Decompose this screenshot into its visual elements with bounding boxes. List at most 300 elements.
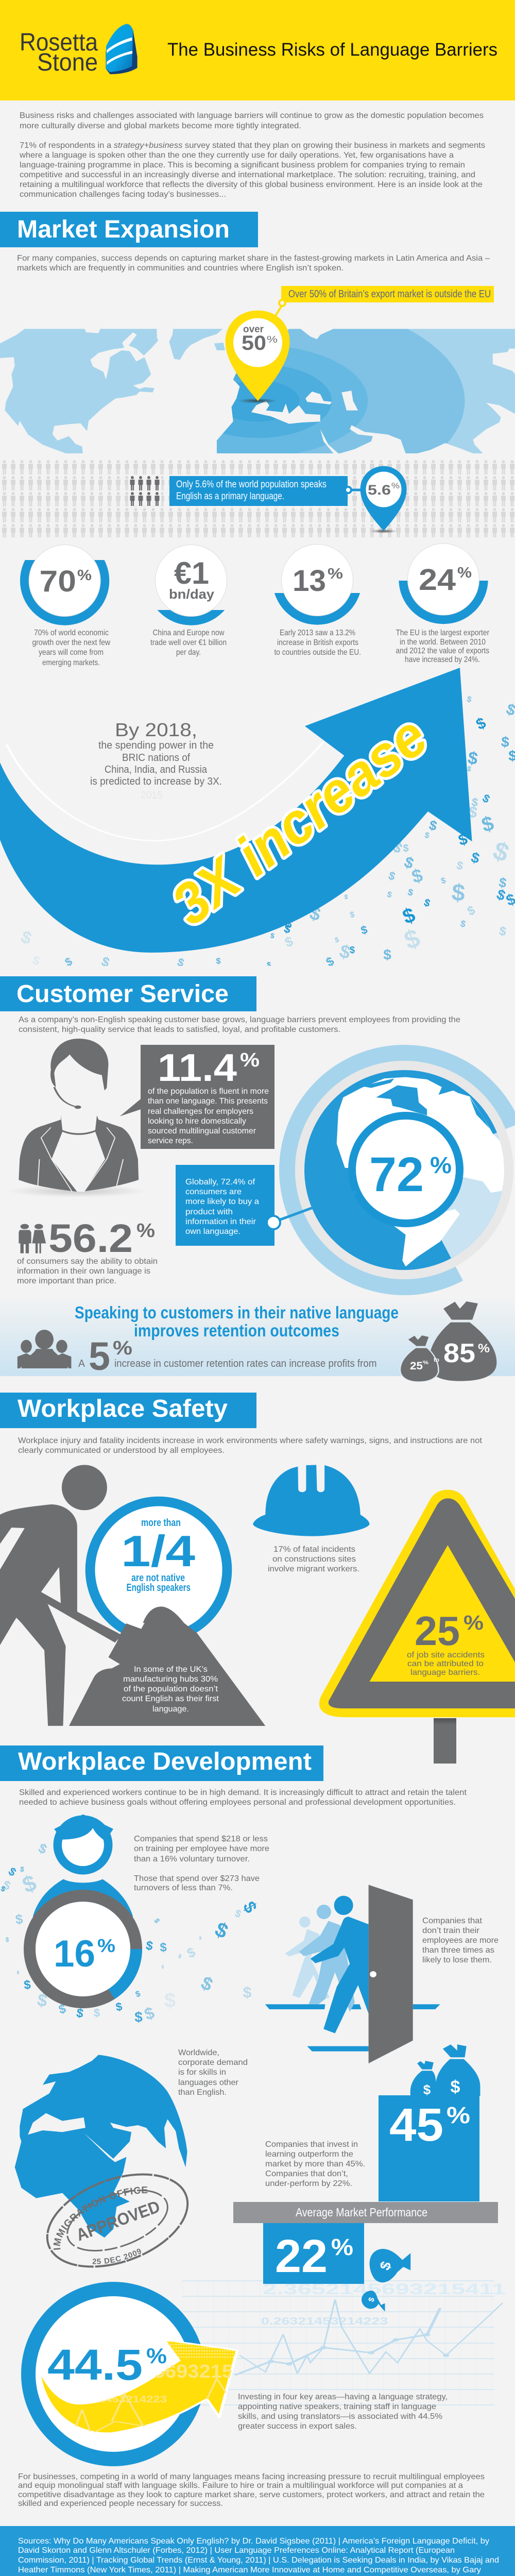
sources panel: Sources: Why Do Many Americans Speak Only English? by Dr. David Sigsbee (2011) | America’s Foreign Language Deficit, by [18,2537,489,2546]
people pattern strip [0,460,515,537]
circle: 1/4 non-native speakers [85,1497,232,1643]
dirt mound with UK text: language. [152,1705,189,1714]
caption: 70% [32,629,110,667]
retention heading: Speaking to customers in their native language [75,1303,399,1322]
caption: 70%: years will come from [39,648,104,657]
icon: employee with 16% donut: 16 [54,1933,95,1975]
header band [0,0,515,100]
scattered dollar signs around arrow: $ [283,933,295,951]
bar: 22% underperform [263,2223,364,2284]
scattered dollar signs around training graphic: $ [6,1865,19,1879]
text: training spend: Those that spend over $273 have [134,1874,260,1883]
bar: 45% outperform: % [447,2102,470,2128]
map pin: over 50%: % [267,334,278,345]
text: companies that don't train: don’t train their [422,1926,480,1935]
scattered dollar signs around arrow: $ [494,886,508,904]
scattered dollar signs around training graphic: $ [19,1870,40,1898]
dirt mound with UK text: In some of the UK’s [134,1665,208,1674]
icon: eight dark people [128,476,161,506]
callout: 5.6% English speakers: English as a primary language. [176,491,284,502]
icon: falling money bags: $ [376,2259,394,2272]
stat: 5% retention [78,1334,377,1379]
scattered dollar signs around arrow [19,695,515,971]
callout: 11.4%: service reps. [148,1137,193,1145]
icon: employee with 16% donut: % [97,1935,115,1956]
callout: Globally 72.4% [176,1165,356,1246]
circle: 1/4 non-native speakers: 1/4 [121,1527,195,1576]
map pin: over 50%: 50 [242,332,266,354]
callout: 11.4% [120,1045,274,1149]
icon: money bags above 45% bar [410,2044,480,2097]
scattered dollar signs around arrow: $ [466,748,479,769]
sources panel [0,2526,515,2576]
scattered dollar signs around arrow: $ [359,923,369,937]
BRIC text: China, India, and Russia [105,764,208,775]
scattered dollar signs around arrow: $ [469,849,482,867]
scattered dollar signs around training graphic: $ [20,1865,25,1874]
scattered dollar signs around arrow: $ [422,897,432,909]
icon: money bags above 45% bar: $ [451,2077,460,2097]
text: four key areas: appointing native speakers, training staff in language [238,2402,436,2411]
stat circle: 70%: % [77,567,92,584]
text: learning outperform [265,2140,365,2188]
customer service text: consistent, high-quality service that leads to satisfied, loyal, and profitable customers. [19,1025,340,1034]
scattered dollar signs around training graphic: $ [198,1972,216,1995]
scattered dollar signs around training graphic: $ [239,1898,261,1917]
text: training spend: than a 16% voluntary turnover. [134,1855,250,1863]
scattered dollar signs around arrow: $ [501,734,510,750]
scattered dollar signs around arrow: $ [465,903,477,919]
scattered dollar signs around training graphic: $ [36,1840,49,1857]
text: training spend: on training per employee have more [134,1844,269,1853]
sources panel: David Skorton and Glenn Altschuler (Forbes, 2012) | User Language Preferences Online: Analytical Report (European [18,2546,455,2555]
dirt mound with UK text [69,1606,265,1726]
scattered dollar signs around arrow: $ [471,795,479,809]
caption: China and Europe: China and Europe now [152,629,225,637]
callout: 11.4%: real challenges for employers [148,1107,253,1116]
text: learning outperform: market by more than 45%. [265,2160,365,2168]
globe: corporate demand [15,2055,187,2238]
header logo: Rosetta Stone: Rosetta [20,29,98,56]
stat: 5% retention: increase in customer retention rates can increase profits from [114,1358,377,1369]
bar label: Average Market Performance [233,2202,498,2223]
text: companies that don't train: than three times as [422,1946,494,1955]
caption: 70%: emerging markets. [42,658,100,667]
caption: 70%: growth over the next few [32,638,110,647]
text: worldwide demand: corporate demand [178,2058,248,2067]
text: worldwide demand [178,2048,248,2097]
stamp: immigration office approved [46,2173,188,2268]
warning sign: 25% [319,1490,515,1764]
scattered dollar signs around training graphic: $ [160,1940,167,1955]
stat: 56.2% [17,1216,158,1285]
scattered dollar signs around training graphic: $ [134,1989,142,1999]
stat: 56.2%: 56.2 [48,1216,133,1261]
closing text: and equip monolingual staff with language skills. Failure to hire or train a multilingual workforce will put companies at a [18,2481,463,2490]
market expansion text [17,254,490,273]
workplace development text: Skilled and experienced workers continue to be in high demand. It is increasingly difficult to attract and retain the talent [19,1788,467,1797]
scattered dollar signs around training graphic: $ [1,1878,12,1893]
callout: Globally 72.4%: information in their [185,1217,256,1226]
customer service text: As a company’s non-English speaking customer base grows, language barriers prevent employees from providing the [19,1015,460,1024]
icon: employee with 16% donut [30,1815,136,2002]
callout: 11.4%: sourced multilingual customer [148,1127,256,1136]
scattered dollar signs around arrow: $ [307,902,323,925]
stat circle: 13%: % [328,566,343,582]
scattered dollar signs around arrow: $ [383,947,391,962]
scattered dollar signs around arrow: $ [283,922,292,936]
scattered dollar signs around training graphic: $ [57,2002,68,2017]
scattered dollar signs around arrow: $ [270,931,275,940]
caption: China and Europe [150,629,227,657]
scattered dollar signs around training graphic: $ [36,1990,49,2011]
workplace development text [19,1788,467,1807]
stamp: immigration office approved: IMMIGRATION OFFICE [54,2187,147,2250]
circle: 1/4 non-native speakers: are not native [131,1572,185,1584]
heading: Market Expansion: Market Expansion [17,216,230,243]
scattered dollar signs around arrow: $ [334,935,340,944]
caption: China and Europe: per day. [176,648,201,657]
callout: 11.4%: 11.4 [158,1046,237,1089]
scattered dollar signs around training graphic [0,1840,261,2025]
callout: Globally 72.4%: own language. [185,1227,241,1236]
stat: 5% retention: 5 [89,1334,110,1379]
callout: Globally 72.4%: consumers are [185,1188,242,1196]
warning sign: 25%: of job site accidents [407,1651,485,1659]
bar: 22% underperform: % [331,2234,353,2260]
workplace development text: needed to achieve business goals without offering employees personal and professional development opportunities. [19,1798,456,1807]
map pin: 5.6%: 5.6 [368,482,391,498]
bar: 22% underperform: 22 [275,2231,328,2282]
warning sign: 25%: 25 [415,1608,460,1654]
stat circle: 70%: 70 [39,565,76,598]
scattered dollar signs around arrow: $ [402,854,416,872]
scattered dollar signs around arrow: $ [480,791,492,806]
icon: employees leaving through door [265,1885,440,2063]
market expansion text: For many companies, success depends on capturing market share in the fastest-growing markets in Latin America and Asia – [17,254,490,263]
callout: 11.4%: than one language. This presents [148,1097,268,1106]
pale chart grid with numbers [182,2281,506,2406]
closing text: For businesses, competing in a world of many languages means facing increasing pressure to recruit multilingual employees [18,2472,485,2481]
stat: 5% retention: % [113,1337,132,1359]
caption: British exports: increase in British exports [277,638,358,647]
scattered dollar signs around arrow: $ [400,923,424,955]
stat circle: €1 bn/day: €1 [174,556,209,590]
scattered dollar signs around arrow: $ [403,843,409,854]
icon: worker with shovel [0,1465,122,1726]
scattered dollar signs around arrow: $ [427,817,439,834]
BRIC text [90,719,222,801]
scattered dollar signs around arrow: $ [473,714,489,733]
scattered dollar signs around training graphic: $ [152,1917,162,1925]
text: four key areas: skills, and using translators—is associated with 44.5% [238,2412,442,2421]
stat: 56.2%: % [136,1220,155,1242]
scattered dollar signs around arrow: $ [267,960,271,969]
workplace safety text: Workplace injury and fatality incidents increase in work environments where safety warnings, signs, and instructions are not [18,1436,483,1445]
icon: money bags 25% to 85%: 85 [443,1338,475,1368]
callout: Globally 72.4%: product with [185,1208,233,1216]
scattered dollar signs around training graphic: $ [233,1908,243,1920]
scattered dollar signs around arrow: $ [400,904,418,928]
stat circle: 24% [399,535,488,624]
scattered dollar signs around arrow: $ [283,916,295,931]
text: training spend: turnovers of less than 7%. [134,1884,233,1892]
arrow label: 3X increase: 3X increase [160,703,439,937]
scattered dollar signs around arrow: $ [489,836,513,868]
circle: 1/4 non-native speakers: more than [141,1517,181,1529]
workplace safety text [18,1436,483,1455]
scattered dollar signs around arrow: $ [457,831,470,849]
stamp: immigration office approved: APPROVED [74,2197,162,2245]
callout: Globally 72.4%: Globally, 72.4% of [185,1178,255,1187]
scattered dollar signs around arrow: $ [409,865,425,887]
scattered dollar signs around arrow: $ [337,940,353,963]
heading: Workplace Safety [0,1393,256,1428]
pale chart grid with numbers: 0.26321453214223 [261,2316,388,2327]
caption: British exports: to countries outside the EU. [274,648,361,657]
dirt mound with UK text: count English as their first [122,1694,219,1703]
icon: man and woman [19,1224,46,1253]
scattered dollar signs around training graphic: $ [94,2006,100,2020]
scattered dollar signs around training graphic: $ [145,1939,154,1954]
circle: 44.5% export success [21,2282,237,2466]
retention heading [75,1303,399,1340]
caption: fatal incidents: involve migrant workers. [268,1565,359,1573]
icon: hard hat [253,1465,370,1536]
world map [0,329,515,453]
text: four key areas: Investing in four key areas—having a language strategy, [238,2393,448,2401]
dirt mound with UK text: manufacturing hubs 30% [123,1675,218,1684]
scattered dollar signs around training graphic: $ [134,2009,143,2025]
scattered dollar signs around arrow: $ [498,924,508,939]
scattered dollar signs around arrow: $ [387,869,397,883]
stat: 56.2%: information in their own language is [17,1267,150,1276]
intro text: where a language is spoken other than the one they currently use for daily operations. Yet, few organisations have a [19,151,454,160]
text: companies that don't train: likely to lose them. [422,1956,492,1964]
scattered dollar signs around arrow: $ [349,910,355,920]
text: four key areas [238,2393,448,2431]
scattered dollar signs around training graphic: $ [23,1978,31,1992]
intro text: Business risks and challenges associated with language barriers will continue to grow as the domestic population becomes [20,111,484,120]
bar: 45% outperform: 45 [389,2099,443,2151]
closing text: competitive disadvantage as they look to capture market share, serve customers, protect workers, and attract and retain the [18,2490,485,2499]
scattered dollar signs around arrow: $ [62,955,75,969]
scattered dollar signs around training graphic: $ [115,2000,123,2013]
text: learning outperform: Companies that don’t, [265,2170,348,2178]
BRIC text: BRIC nations of [122,752,190,764]
callout: 11.4%: of the population is fluent in more [148,1087,269,1096]
warning sign: 25%: can be attributed to [407,1659,484,1668]
bar label: Average Market Performance: Average Market Performance [296,2206,427,2219]
scattered dollar signs around training graphic: $ [243,1985,252,2001]
warning sign: 25%: % [464,1612,484,1634]
caption: British exports: Early 2013 saw a 13.2% [280,629,355,637]
yellow arrow [39,2340,237,2433]
scattered dollar signs around arrow: $ [345,893,348,901]
callout: 5.6% English speakers [169,476,363,506]
text: companies that don't train: employees are more [422,1936,499,1945]
BRIC text: is predicted to increase by 3X. [90,776,222,787]
icon: money bags 25% to 85%: % [423,1360,428,1366]
scattered dollar signs around arrow: $ [466,764,472,773]
callout: Britain's export market [274,286,494,317]
caption: fatal incidents: 17% of fatal incidents [273,1545,355,1554]
globe: 72%: % [430,1152,452,1178]
scattered dollar signs around training graphic: $ [212,1918,231,1943]
icon: falling money bags [362,2249,410,2312]
intro text: competitive and successful in an increasingly diverse and international marketplace. The solution: recruiting, training, and [20,171,475,179]
pale chart grid with numbers: 2.3652145693215411 [263,2281,506,2298]
text: learning outperform: learning outperform the [265,2150,353,2159]
heading: Market Expansion [0,212,258,247]
map pin: 5.6%: % [391,482,400,490]
map pin: 5.6% [360,466,407,533]
stat circle: 24%: % [457,565,472,581]
yellow arrow: 5693215 [153,2361,233,2382]
map pin: over 50%: over [243,324,264,335]
icon: customer service agent [8,1039,147,1197]
heading: Customer Service: Customer Service [16,980,229,1008]
icon: customers group [18,1330,71,1368]
icon: money bags 25% to 85%: to [434,1357,439,1363]
scattered dollar signs around arrow: $ [440,876,447,886]
caption: China and Europe: trade well over €1 billion [150,638,227,647]
caption: EU exporter: have increased by 24%. [405,655,480,664]
scattered dollar signs around arrow: $ [455,858,465,873]
closing text: skilled and experienced people necessary for success. [18,2499,223,2508]
scattered dollar signs around arrow: $ [407,887,414,898]
scattered dollar signs around training graphic: $ [14,1911,24,1927]
stat circle: 13% [274,544,360,625]
intro text: retaining a multilingual workforce that reflects the diversity of this global business environment. Here is an inside look at the [20,180,483,189]
scattered dollar signs around arrow: $ [479,812,496,837]
stat circle: 13%: 13 [293,564,326,598]
scattered dollar signs around training graphic: $ [75,2006,85,2021]
text: four key areas: greater success in export sales. [238,2422,357,2431]
customer service text [19,1015,460,1034]
map pin: over 50% [226,311,290,403]
caption: EU exporter [396,629,490,664]
text: learning outperform: under-perform by 22%. [265,2179,352,2188]
circle: 44.5% export success: 44.5 [47,2341,143,2389]
scattered dollar signs around arrow: $ [323,954,337,970]
big growth arrow [0,668,472,953]
header logo: Rosetta Stone: Stone [37,49,98,76]
scattered dollar signs around training graphic: $ [6,1936,9,1943]
icon: money bags above 45% bar: $ [423,2082,431,2097]
intro text: language-training programme in place. This is becoming a significant business problem for companies trying to remain [20,161,465,170]
BRIC text: the spending power in the [98,740,214,751]
scattered dollar signs around training graphic: $ [199,1936,202,1940]
stat circle: 24%: 24 [419,563,456,597]
caption: 70%: 70% of world economic [34,629,109,637]
scattered dollar signs around arrow: $ [467,803,478,822]
BRIC text: 2015 [141,790,163,801]
scattered dollar signs around arrow: $ [99,953,112,971]
scattered dollar signs around arrow: $ [423,831,431,840]
stat circle: €1 bn/day [155,545,227,625]
dirt mound with UK text: of the population doesn’t [124,1685,218,1693]
stat circle: 70% [20,536,109,625]
yellow arrow: 1453214223 [98,2394,167,2404]
text: worldwide demand: is for skills in [178,2068,226,2077]
circle: 1/4 non-native speakers: English speakers [127,1582,191,1594]
intro text: communication challenges facing today’s businesses... [20,190,226,199]
intro text [19,111,485,199]
stat: 56.2%: more important than price. [17,1277,116,1285]
text: worldwide demand: than English. [178,2088,227,2097]
icon: money bags 25% to 85% [400,1301,496,1382]
scattered dollar signs around arrow: $ [176,955,186,970]
main title: The Business Risks of Language Barriers [167,40,497,60]
sources panel: Heather Timmons (New York Times, 2011) | Making American More Innovative at Home and Competitive Overseas, by Gary [18,2566,481,2574]
text: worldwide demand: languages other [178,2078,239,2087]
text: companies that don't train: Companies that [422,1917,483,1925]
scattered dollar signs around arrow: $ [386,890,393,900]
scattered dollar signs around arrow: $ [216,957,221,965]
icon: money bags 25% to 85%: % [478,1342,490,1355]
bar: 45% outperform [379,2095,479,2201]
scattered dollar signs around training graphic: $ [178,1954,182,1960]
stat circle: €1 bn/day: bn/day [169,586,215,602]
stat: 56.2%: of consumers say the ability to obtain [17,1257,158,1266]
retention band background [0,1297,515,1376]
warning sign: 25%: language barriers. [410,1668,480,1677]
globe: 72%: 72 [369,1147,424,1202]
callout: Globally 72.4%: more likely to buy a [185,1197,259,1206]
caption: EU exporter: and 2012 the value of exports [396,647,489,655]
market expansion text: markets which are frequently in communities and countries where English isn’t spoken. [17,264,344,273]
callout: 5.6% English speakers: Only 5.6% of the world population speaks [176,479,327,490]
callout: 11.4%: looking to hire domestically [148,1117,246,1126]
text: companies that don't train [422,1917,499,1964]
BRIC text: By 2018, [115,719,197,740]
text: learning outperform: Companies that invest in [265,2140,358,2149]
scattered dollar signs around arrow: $ [350,945,355,955]
intro text: 71% of respondents in a strategy+business survey stated that they plan on growing their business in markets and segments [20,141,485,150]
closing text [18,2472,485,2508]
caption: fatal incidents [268,1545,359,1573]
scattered dollar signs around arrow: $ [30,953,42,969]
caption: EU exporter: The EU is the largest exporter [396,629,490,637]
dark people group backing [128,476,161,506]
heading: Customer Service [0,976,256,1011]
heading: Workplace Safety: Workplace Safety [18,1395,228,1422]
callout: 11.4%: % [240,1049,260,1071]
icon: falling money bags: $ [367,2296,376,2303]
scattered dollar signs around training graphic: $ [184,1944,198,1961]
scattered dollar signs around arrow: $ [497,874,508,891]
heading: Workplace Development [0,1745,323,1781]
caption: fatal incidents: on constructions sites [272,1555,356,1564]
scattered dollar signs around arrow: $ [451,878,466,906]
scattered dollar signs around training graphic: $ [162,1965,164,1969]
stat: 5% retention: A [78,1358,85,1369]
sources panel: Commission, 2011) | Tracking Global Trends (Ernst & Young, 2011) | U.S. Delegation is Seeking Deals in India, by Vikas Bajaj and [18,2556,499,2565]
text: training spend: Companies that spend $218 or less [134,1835,268,1843]
text: training spend [134,1835,269,1892]
text: worldwide demand: Worldwide, [178,2048,219,2057]
stamp: immigration office approved: 25 DEC 2009 [93,2248,141,2264]
scattered dollar signs around arrow: $ [466,695,473,704]
scattered dollar signs around training graphic: $ [142,2003,157,2024]
workplace safety text: clearly communicated or understood by all employees. [18,1446,225,1455]
caption: British exports [274,629,361,657]
intro text: more culturally diverse and global markets become more tightly integrated. [20,122,301,130]
scattered dollar signs around arrow: $ [390,839,405,857]
scattered dollar signs around training graphic: $ [17,1970,20,1975]
icon: money bags 25% to 85%: 25 [410,1360,423,1372]
